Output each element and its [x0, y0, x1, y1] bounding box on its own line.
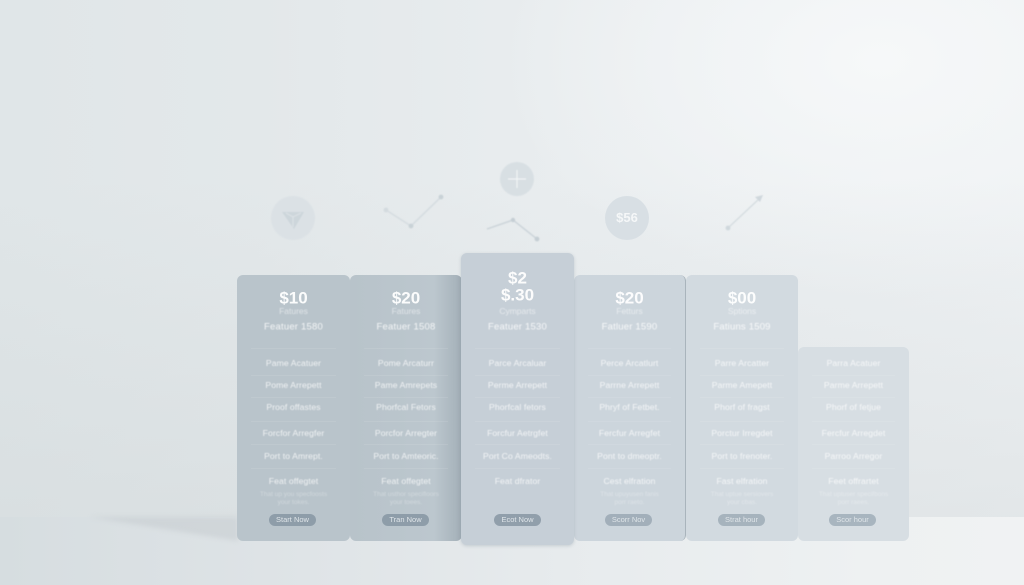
fine print [373, 491, 439, 506]
feature row 4: Forcfur Aetrgfet [487, 428, 548, 438]
price: $20 [615, 288, 644, 308]
pricing card 5 [686, 275, 798, 541]
feature row 1: Parce Arcaluar [489, 358, 546, 368]
price: $00 [728, 288, 756, 308]
feature row 3: Phryf of Fetbet. [599, 402, 660, 412]
call-to-action button [718, 514, 765, 526]
feature headline: Featuer 1530 [488, 322, 547, 332]
feature row 4: Fercfur Arregfet [599, 428, 660, 438]
pricing card 4 [574, 275, 686, 541]
tier label: Fetturs [616, 306, 643, 316]
feature headline: Fatiuns 1509 [713, 322, 771, 332]
call-to-action button [829, 514, 876, 526]
feature row 3: Phorf of fragst [714, 402, 770, 412]
feature row 3: Phorf of fetjue [826, 402, 881, 412]
pricing card 2 [350, 275, 462, 541]
feature row 4: Fercfur Arregdet [822, 428, 885, 438]
tier label: Cymparts [499, 306, 536, 316]
call-to-action button [382, 514, 429, 526]
pricing card 1 [237, 275, 350, 541]
feature row 2: Parme Arrepett [824, 380, 883, 390]
feature headline: Fatluer 1590 [602, 322, 657, 332]
feature row 5: Pont to dmeoptr. [597, 451, 662, 461]
feature row 1: Parre Arcatter [715, 358, 769, 368]
feature row 6: Fast elfration [716, 476, 768, 486]
call-to-action button [494, 514, 541, 526]
call-to-action button: Strat hour [725, 515, 758, 524]
fine print [798, 491, 909, 507]
feature row 2: Parrne Arrepett [600, 380, 659, 390]
feature row 5: Port Co Ameodts. [483, 451, 552, 461]
fine print [686, 491, 798, 507]
icon: line chart rising [384, 194, 444, 228]
call-to-action button: Scorr Nov [612, 515, 645, 524]
feature headline: Featuer 1580 [264, 322, 323, 332]
fine print: That up you specfoosts [260, 491, 327, 498]
fine print: porr raeto. [614, 499, 644, 506]
feature row 6: Cest elfration [603, 476, 656, 486]
pricing card 3 (featured) [461, 253, 574, 545]
floor shadow beside first card [118, 518, 237, 540]
fine print: That uptue sersiovers [711, 491, 773, 498]
fine print [260, 491, 327, 506]
call-to-action button: Ecot Now [501, 515, 534, 524]
fine print: your toees. [390, 499, 422, 506]
fine print: porr raees. [838, 499, 869, 506]
price: $10 [279, 288, 308, 308]
price: $20 [392, 288, 420, 308]
feature row 1: Pome Arcaturr [378, 358, 434, 368]
feature row 6: Feat dfrator [495, 476, 540, 486]
feature row 5: Port to frenoter. [712, 451, 772, 461]
pricing card 6 (short) [798, 347, 909, 541]
fine print: your tokes. [278, 499, 309, 506]
feature row 1: Perce Arcatlurt [601, 358, 658, 368]
feature row 3: Phorfcal fetors [489, 402, 546, 412]
feature row 2: Perme Arrepett [488, 380, 547, 390]
feature row 5: Parroo Arregor [825, 451, 882, 461]
icon: triangle badge [272, 197, 314, 230]
feature row 1: Parra Acatuer [827, 358, 880, 368]
floor [0, 517, 1024, 585]
feature row 5: Port to Amrept. [264, 451, 323, 461]
feature row 6: Feat offegtet [381, 476, 431, 486]
feature row 5: Port to Amteoric. [373, 451, 439, 461]
feature row 1: Pame Acatuer [266, 358, 321, 368]
fine print: That usthor specifloors [373, 491, 439, 498]
fine print [600, 491, 659, 506]
feature row 4: Porctur Irregdet [711, 428, 773, 438]
fine print: your cbas. [727, 499, 757, 506]
feature row 2: Parme Amepett [712, 380, 772, 390]
feature headline: Featuer 1508 [377, 322, 435, 332]
icon: diagonal arrow [726, 195, 763, 230]
feature row 6: Feat offegtet [269, 476, 318, 486]
feature row 2: Pome Arrepett [265, 380, 322, 390]
tier label: Fatures [392, 306, 420, 316]
fine print: That upuyusen fanis [600, 491, 659, 498]
feature row 3: Proof offastes [266, 402, 321, 412]
call-to-action button [269, 514, 316, 526]
tier label: Sptions [728, 306, 756, 316]
call-to-action button [605, 514, 652, 526]
fine print: That uptuser specifbons [819, 491, 888, 498]
call-to-action button: Start Now [276, 515, 309, 524]
icon: price badge [605, 196, 649, 240]
feature row 2: Pame Amrepets [375, 380, 437, 390]
feature row 4: Porcfor Arregter [375, 428, 437, 438]
feature row 4: Forcfor Arregfer [263, 428, 324, 438]
tier label: Fatures [279, 306, 308, 316]
call-to-action button: Tran Now [389, 515, 422, 524]
icon: line chart falling [487, 218, 540, 242]
price first line: $2 [508, 268, 527, 288]
call-to-action button: Scor hour [836, 515, 869, 524]
feature row 6: Feet offrartet [828, 476, 879, 486]
icon: plus badge [500, 162, 534, 196]
icon: price badge: $56 [616, 210, 638, 225]
price second line: $.30 [501, 286, 534, 304]
feature row 3: Phorfcal Fetors [376, 402, 436, 412]
